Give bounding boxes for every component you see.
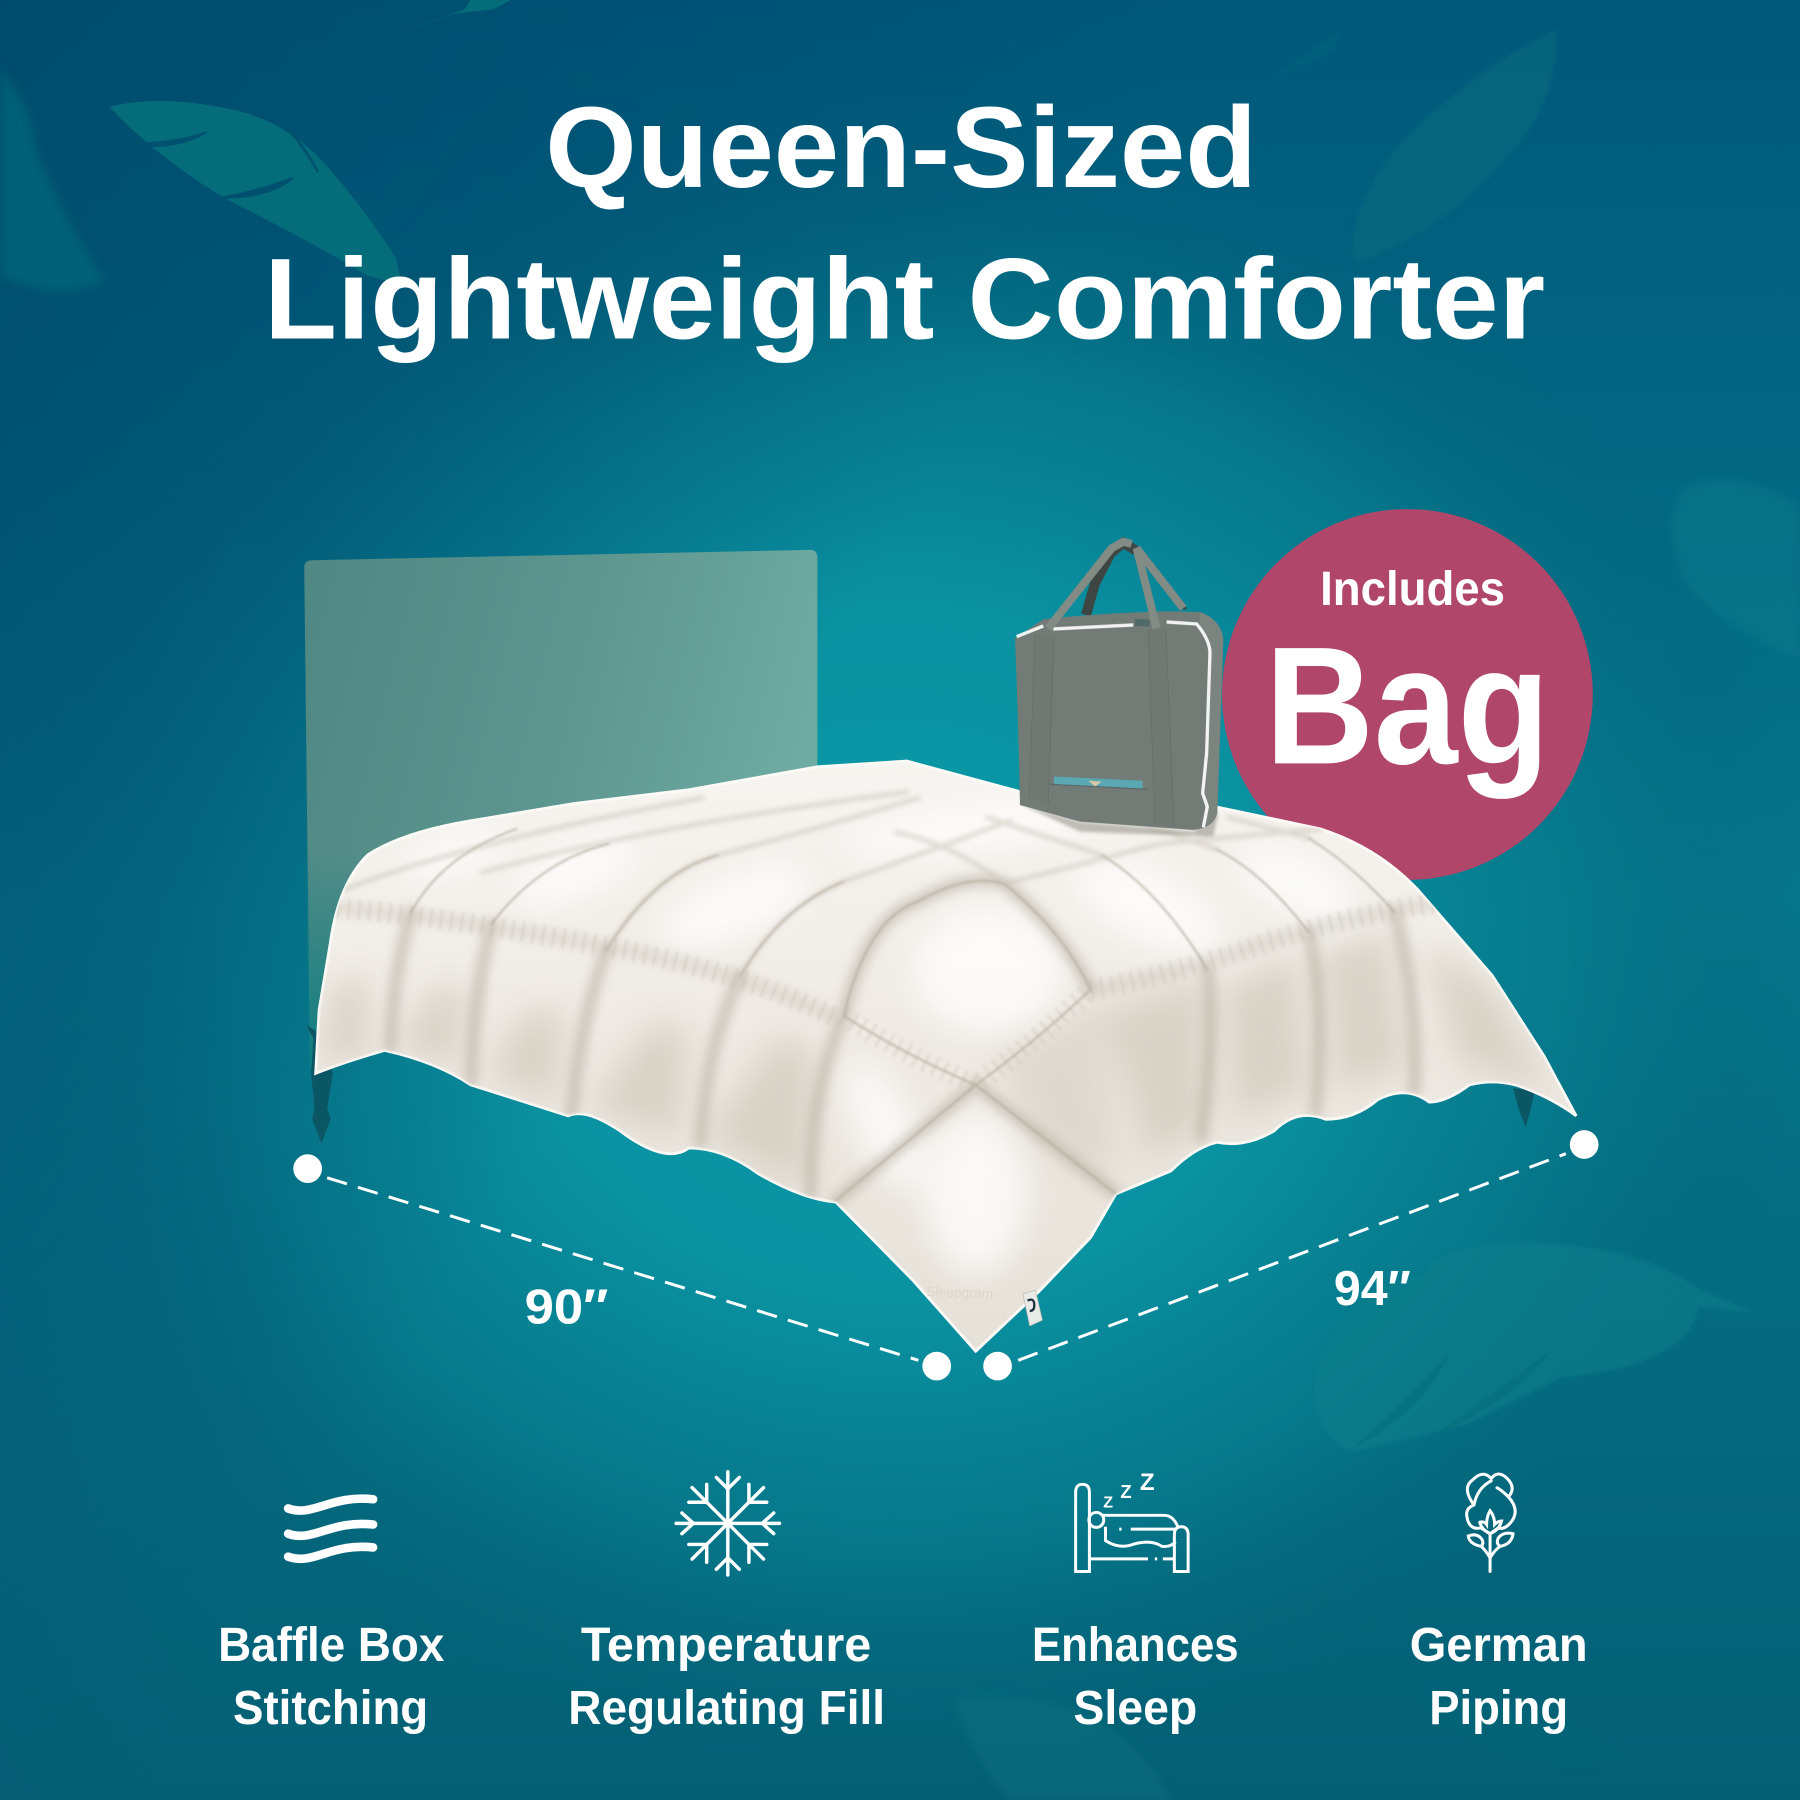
feature: baffle box stitching bbox=[218, 1499, 444, 1735]
bed leg left bbox=[307, 1025, 333, 1143]
feather: bottom right bbox=[1314, 1242, 1756, 1452]
bag body bbox=[1015, 611, 1223, 830]
label: Baffle Box bbox=[218, 1618, 444, 1672]
icon: snowflake bbox=[676, 1472, 779, 1575]
bag handles back bbox=[1086, 543, 1136, 615]
bag zipper bbox=[1017, 622, 1210, 827]
feature: german piping bbox=[1410, 1474, 1588, 1735]
label bbox=[1032, 1618, 1239, 1735]
label: Enhances bbox=[1032, 1618, 1239, 1672]
icon: zzz: Z bbox=[1120, 1481, 1132, 1502]
feather: right edge bbox=[1672, 480, 1800, 660]
icon: zzz: Z bbox=[1140, 1469, 1155, 1496]
comforter body bbox=[316, 761, 1576, 1351]
icon: waves bbox=[288, 1499, 373, 1559]
label: Sleep bbox=[1073, 1681, 1197, 1735]
callout circle: includes bag bbox=[1222, 509, 1593, 880]
feather: top right bbox=[1353, 29, 1556, 264]
title bbox=[264, 84, 1545, 364]
label: Regulating Fill bbox=[568, 1681, 885, 1735]
title: Lightweight Comforter bbox=[264, 236, 1545, 364]
dimension: 94 inch: 94″ bbox=[1334, 1261, 1411, 1316]
feature: temperature regulating fill bbox=[568, 1472, 885, 1735]
puff highlights bbox=[394, 787, 1366, 1274]
label bbox=[1410, 1618, 1588, 1735]
side shading bbox=[321, 930, 1550, 1188]
dimension: 90 inch bbox=[293, 1154, 951, 1380]
feather: top left bbox=[109, 101, 402, 285]
bag side panel bbox=[1193, 612, 1223, 830]
top surface seams bbox=[344, 792, 1320, 976]
bag handles front bbox=[1048, 542, 1183, 628]
label: Piping bbox=[1429, 1681, 1568, 1735]
label bbox=[218, 1618, 444, 1735]
feature: enhances sleep bbox=[1032, 1469, 1239, 1735]
feather: top right small bbox=[1268, 29, 1343, 80]
feather: left edge bbox=[0, 69, 106, 291]
title: Queen-Sized bbox=[545, 84, 1257, 212]
icon: sleeping in bed bbox=[1076, 1484, 1188, 1572]
travel bag bbox=[1015, 542, 1223, 837]
feather: bottom right faint bbox=[1423, 1688, 1630, 1765]
bag zip pull bbox=[1135, 619, 1150, 627]
feather: bottom centre bbox=[953, 1695, 1171, 1800]
icon: zzz: Z bbox=[1103, 1493, 1113, 1511]
label: Stitching bbox=[233, 1681, 428, 1735]
label: German bbox=[1410, 1618, 1588, 1672]
gathered wrinkles along seams bbox=[327, 898, 1481, 1085]
callout circle: includes bag: Includes bbox=[1320, 562, 1505, 616]
bed leg right bbox=[1513, 1088, 1535, 1127]
bag shadow bbox=[1018, 803, 1218, 837]
label bbox=[568, 1618, 885, 1735]
dimension: 90 inch: 90″ bbox=[525, 1280, 608, 1335]
bed headboard and legs bbox=[304, 550, 1535, 1143]
headboard bbox=[304, 550, 817, 1068]
soft seam shadows bbox=[327, 881, 1481, 1201]
callout circle: includes bag: Bag bbox=[1265, 611, 1550, 799]
label tag bbox=[1023, 1290, 1042, 1326]
bag pocket label bbox=[1049, 777, 1148, 789]
icon: cotton flower bbox=[1467, 1474, 1515, 1572]
comforter shading bbox=[321, 787, 1550, 1274]
feather: top edge bbox=[393, 0, 511, 34]
comforter bbox=[316, 761, 1576, 1351]
icon: zzz bbox=[1103, 1469, 1155, 1511]
bag straps bbox=[1029, 627, 1174, 827]
label: Temperature bbox=[581, 1618, 871, 1672]
fine seam lines bbox=[411, 829, 1395, 1201]
woven brand text: Sleepgram bbox=[926, 1284, 993, 1301]
dimension: 94 inch bbox=[983, 1130, 1599, 1380]
